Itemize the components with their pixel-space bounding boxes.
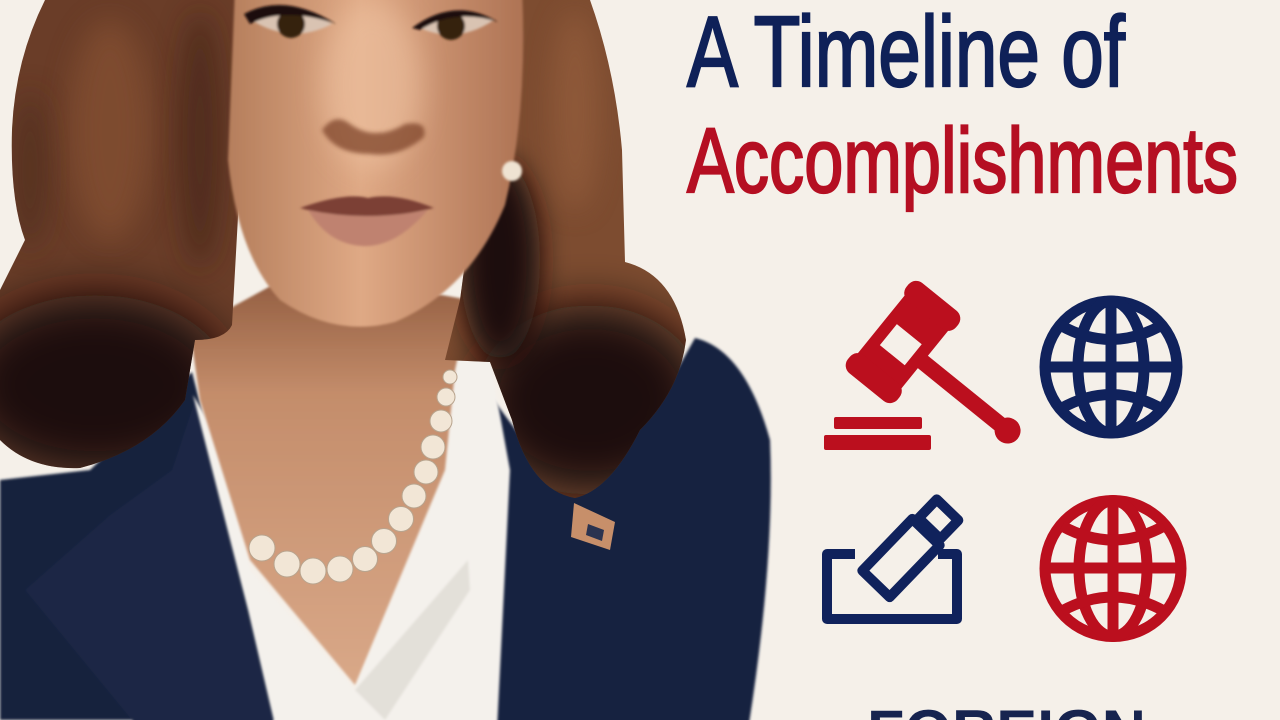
jacket [0, 338, 771, 720]
earring [502, 161, 522, 181]
lapel pin [571, 503, 615, 550]
portrait photo [0, 0, 771, 720]
icon: gavel [824, 277, 1056, 481]
eyes [244, 5, 498, 40]
blouse [193, 300, 510, 720]
hair right [445, 0, 686, 498]
face [228, 0, 523, 327]
icon: ballot box with marker [827, 497, 961, 619]
neck and chest [190, 270, 470, 685]
title [687, 0, 1238, 212]
hair left [0, 0, 238, 468]
icon: navy globe [1045, 301, 1177, 433]
cheek highlight [322, 0, 422, 170]
pearl necklace [249, 370, 457, 584]
lips [300, 196, 434, 246]
nose [322, 119, 425, 155]
icon: red globe [1045, 500, 1181, 636]
